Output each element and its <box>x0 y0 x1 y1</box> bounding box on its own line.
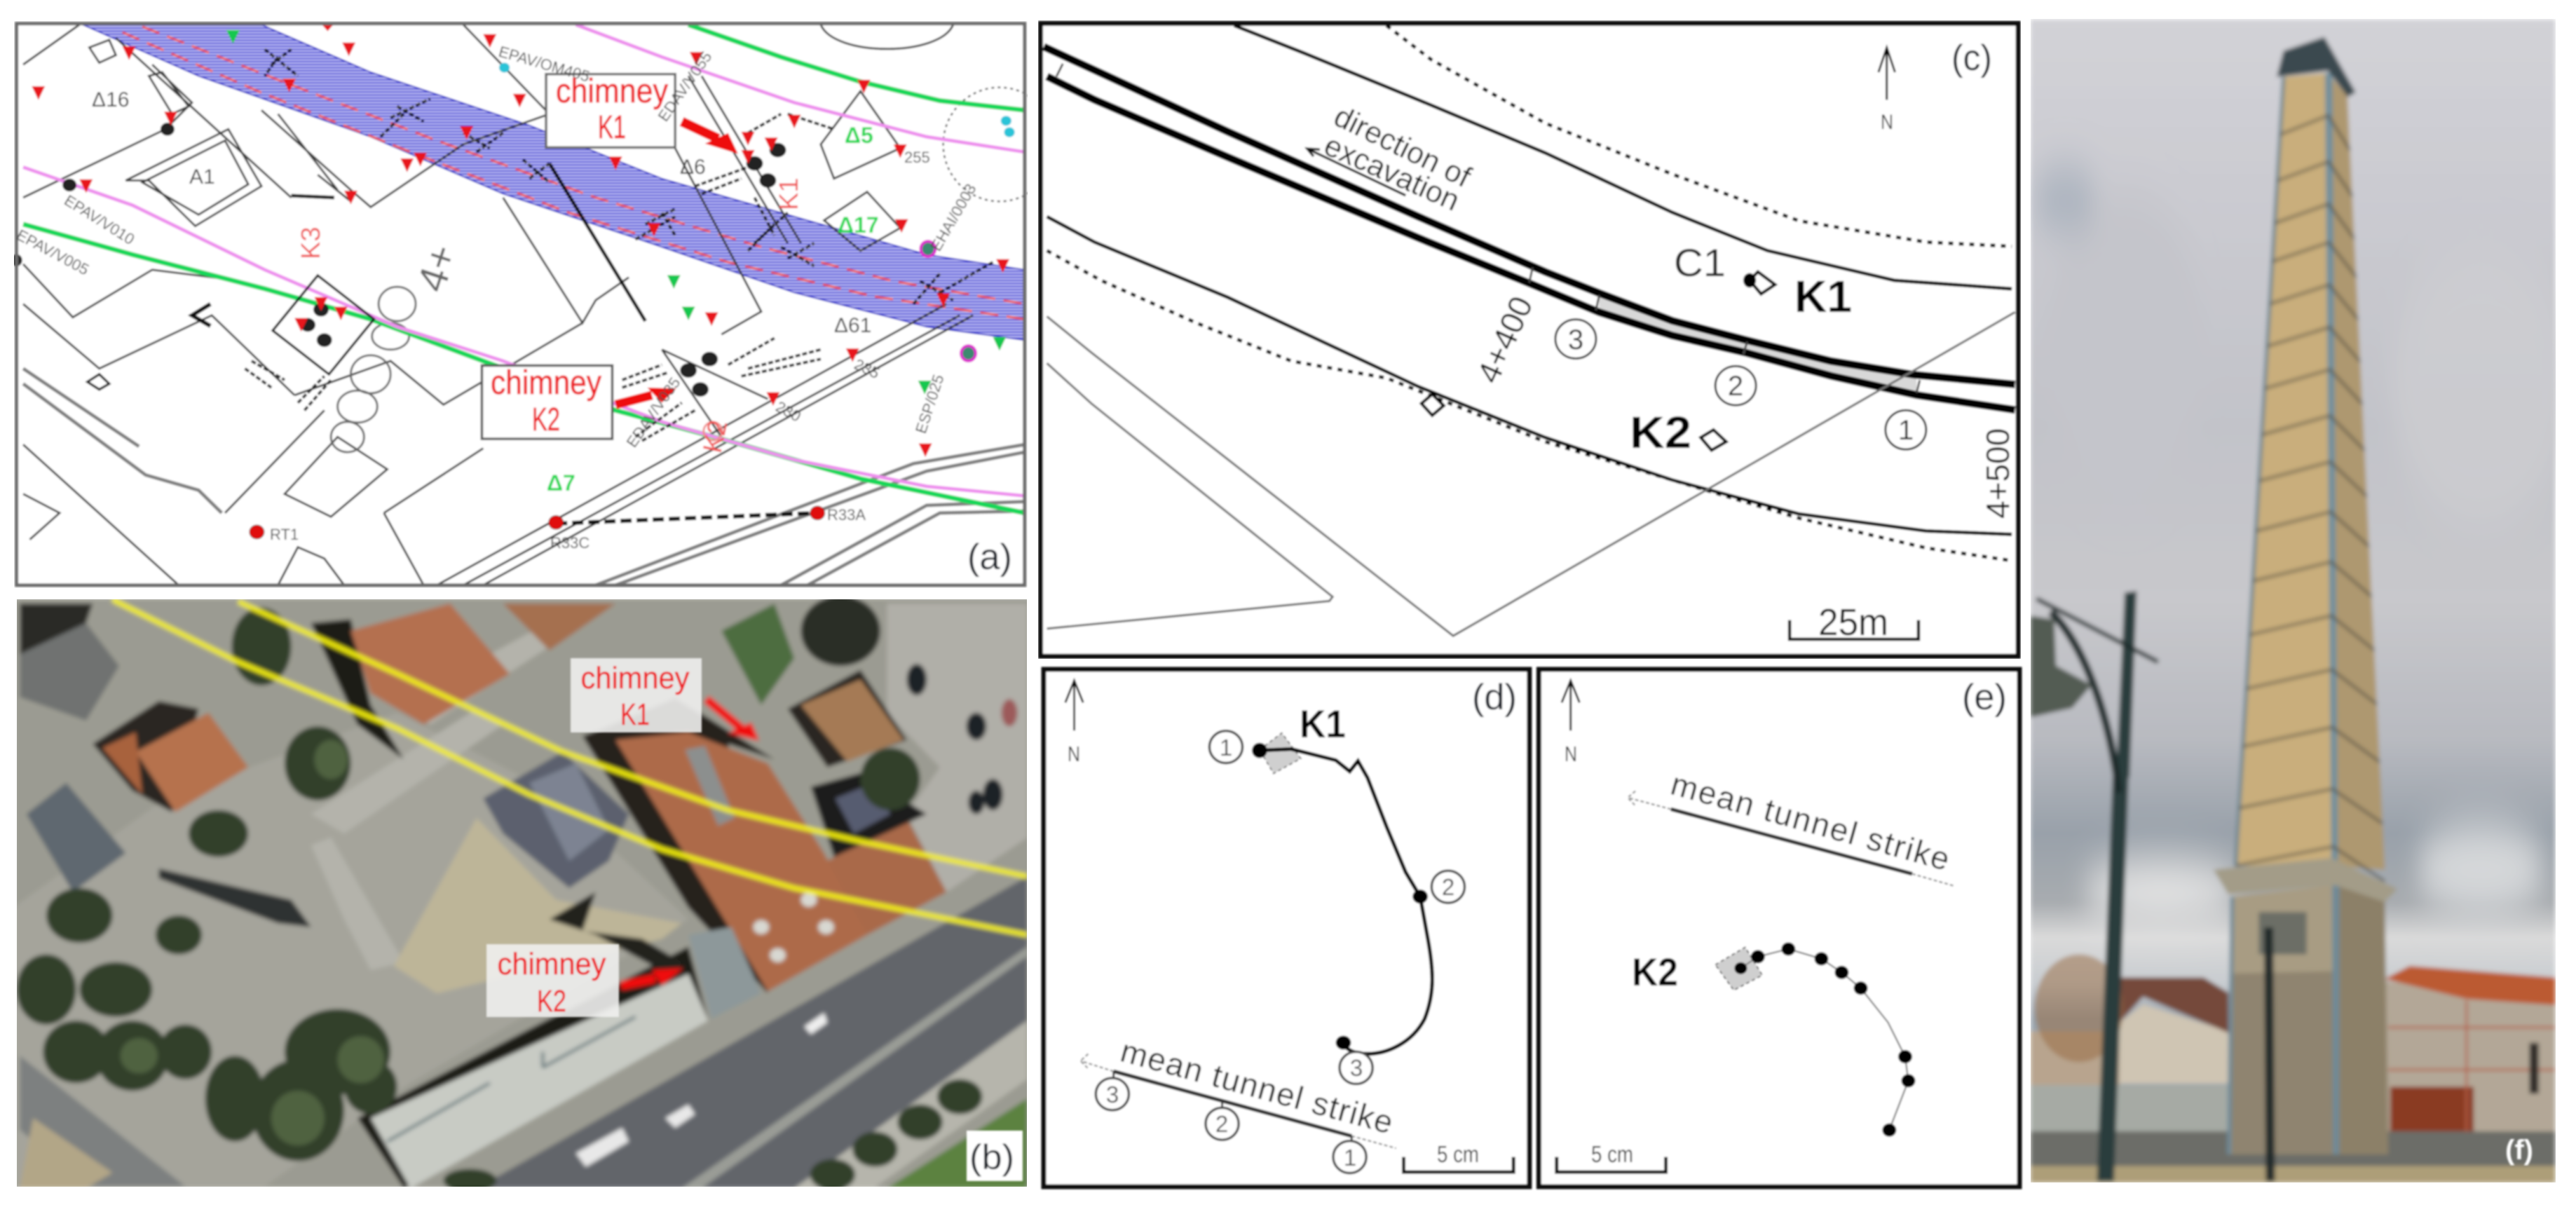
solar panels left <box>27 783 125 892</box>
glass roof <box>483 751 629 888</box>
sky <box>2031 19 2556 1181</box>
plan drawing <box>1041 23 2018 656</box>
map labels: K2 <box>698 418 733 456</box>
skylight strip <box>685 746 735 826</box>
strike extensions <box>1081 1054 1396 1148</box>
map labels: A1 <box>189 165 215 189</box>
K2 labels: (e) <box>1962 677 2007 718</box>
panel a: tunnel plan map <box>11 24 1056 585</box>
map labels: Δ7 <box>547 470 575 496</box>
mean strike line <box>1671 809 1912 874</box>
map labels: K3 <box>297 227 326 259</box>
plan labels: C1 <box>1674 240 1726 285</box>
cars <box>576 1128 629 1167</box>
panel letter f: (f) <box>2505 1135 2533 1166</box>
photo scene <box>2031 19 2570 1183</box>
green lawn top <box>721 604 794 705</box>
panel letter a: (a) <box>967 537 1012 578</box>
footprint of chimney K2 <box>1715 947 1762 990</box>
chimney K1 text: K1 <box>620 697 650 732</box>
top left building <box>20 619 119 721</box>
chimney K2 label <box>491 364 601 437</box>
scale bar <box>1557 1157 1666 1172</box>
K1 labels: 3 <box>1350 1055 1363 1081</box>
map labels: 235 <box>852 355 882 382</box>
displacement curve <box>1740 949 1908 1130</box>
arrow to K1 <box>682 121 738 154</box>
plaque <box>2258 912 2307 955</box>
clouds <box>2033 170 2570 924</box>
plan labels: 3 <box>1568 325 1583 355</box>
panel border <box>1041 23 2018 656</box>
low wall <box>2031 1085 2230 1133</box>
chimney base right <box>2337 885 2388 1154</box>
map labels: 230 <box>773 397 804 425</box>
tunnel influence lines <box>1047 25 2012 534</box>
map labels: EPAV/OM405 <box>497 43 592 86</box>
base corners <box>2227 885 2339 1154</box>
scaffolding <box>2388 1000 2556 1131</box>
road <box>477 876 1028 1188</box>
pink alignment lines <box>23 25 1025 496</box>
tan square <box>394 818 682 993</box>
measurement dots <box>1734 942 1915 1137</box>
chimney K1 label <box>556 73 668 145</box>
red monitoring points <box>250 506 825 539</box>
panel letter b: (b) <box>969 1138 1014 1177</box>
circled numbers <box>1096 731 1464 1173</box>
red hoarding <box>2390 1086 2474 1138</box>
instrumentation targets <box>11 123 786 396</box>
chimney shadow <box>159 868 311 927</box>
courtyard building <box>811 773 927 857</box>
small lamp post <box>2268 927 2270 1181</box>
chimney K1 label: K1 <box>598 109 626 145</box>
roof windows <box>754 893 834 962</box>
panel c: tunnel alignment plan <box>1041 23 2018 656</box>
right building roof <box>2385 966 2556 1005</box>
sidewalk and verge <box>794 1021 1028 1188</box>
panel border <box>1539 669 2019 1187</box>
chimney base left <box>2228 885 2337 1154</box>
footprint of chimney K1 <box>1260 733 1301 774</box>
K1 labels: mean tunnel strike <box>1117 1032 1397 1141</box>
panel f: chimney photograph <box>2031 19 2570 1183</box>
north arrow <box>1879 48 1895 100</box>
map drawing <box>11 24 1056 585</box>
map labels: ESP/025 <box>912 372 948 436</box>
chimney K1 box <box>546 74 675 147</box>
dotted limits <box>1047 25 2012 561</box>
window <box>2530 1043 2539 1093</box>
right pavement <box>887 604 1028 892</box>
K2 labels: mean tunnel strike <box>1667 765 1954 878</box>
plan labels: excavation <box>1319 128 1464 218</box>
parked cars <box>907 664 1003 814</box>
left low houses <box>2031 1031 2119 1085</box>
ground <box>13 598 1033 1188</box>
panel d: K1 displacement path <box>1044 669 1529 1187</box>
plan labels: direction of <box>1329 100 1477 195</box>
K1 labels: 5 cm <box>1437 1141 1479 1167</box>
chimney K2 text: chimney <box>498 947 606 981</box>
green alignment lines <box>23 25 1025 513</box>
bottom left street <box>20 1056 185 1186</box>
shaft edges <box>2325 73 2338 866</box>
north arrow <box>1065 681 1083 730</box>
left building <box>2118 1004 2228 1084</box>
K1 drawing <box>1044 669 1529 1187</box>
arrow to K1 <box>707 699 759 741</box>
map labels: RT1 <box>270 526 299 543</box>
K1 labels: 1 <box>1220 735 1232 761</box>
chimney K1 label box <box>571 658 702 732</box>
red survey triangles <box>32 24 1009 457</box>
letter box <box>967 1131 1023 1181</box>
panel border <box>1044 669 1529 1187</box>
measurement dots <box>1252 743 1428 1050</box>
ground <box>2031 1131 2556 1170</box>
map labels: Δ5 <box>845 123 873 148</box>
scale bar <box>1404 1157 1513 1172</box>
chimney K1 text <box>580 661 690 732</box>
chimney K1 label: chimney <box>556 73 668 110</box>
map labels: Δ6 <box>680 156 706 179</box>
chimney shaft left face <box>2235 73 2333 866</box>
plan labels: K1 <box>1794 271 1852 322</box>
circled numbers <box>1555 320 1926 449</box>
tunnel centre lines <box>123 27 1025 319</box>
cyan points <box>499 62 1015 137</box>
map labels: Δ17 <box>838 212 879 238</box>
chimney K2 text <box>498 947 606 1018</box>
road outlines <box>1047 312 2015 636</box>
panel b: aerial photograph <box>13 596 1033 1192</box>
panel e: K2 displacement path <box>1539 669 2019 1187</box>
scale bar <box>1790 620 1919 639</box>
north arrow <box>1562 681 1579 730</box>
K2 labels: K2 <box>1632 950 1678 994</box>
aerial scene <box>13 596 1033 1192</box>
plan labels: 2 <box>1728 371 1743 402</box>
map labels: 4+ <box>409 239 466 297</box>
bottom left roof <box>20 1118 113 1188</box>
map labels: EPAV/V005 <box>14 226 92 278</box>
chimney K2 label: chimney <box>491 364 601 402</box>
map labels: EPAV/V010 <box>61 191 137 248</box>
displacement curve <box>1260 749 1432 1054</box>
iron hoops <box>2235 116 2385 881</box>
marker dot C1 <box>1743 273 1756 287</box>
right building wall <box>2385 981 2556 1139</box>
arrow to K2 <box>621 968 683 986</box>
panel border <box>17 24 1025 585</box>
bright tree patches <box>121 740 384 1145</box>
tunnel walls <box>1044 47 2015 410</box>
left building roofs <box>2118 977 2228 1033</box>
paved plaza <box>13 713 688 1186</box>
plan labels: 1 <box>1898 415 1914 446</box>
K1 labels: N <box>1068 742 1080 766</box>
K2 drawing <box>1539 669 2019 1187</box>
K1 labels: 2 <box>1442 874 1454 900</box>
K2 labels <box>1565 677 2007 1167</box>
chimney K2 box <box>482 366 612 439</box>
ovals <box>331 287 416 452</box>
plan labels: 25m <box>1818 601 1888 643</box>
grey double road lines <box>23 369 1025 585</box>
chimney K2 text: K2 <box>537 984 566 1018</box>
K2 labels: 5 cm <box>1591 1141 1633 1167</box>
chimney cap <box>2277 37 2356 97</box>
chimney K2 label box <box>486 944 619 1017</box>
long pale building <box>357 946 708 1188</box>
K2 labels: N <box>1565 742 1577 766</box>
magenta markers <box>921 241 976 361</box>
arrow to K2 <box>615 388 676 404</box>
strike ticks <box>1114 1071 1351 1143</box>
plan labels: N <box>1881 111 1893 134</box>
map labels: EDAV/V035 <box>623 374 684 451</box>
lamp post <box>2097 770 2129 1181</box>
light pavement strips <box>311 608 609 970</box>
K1 labels: 1 <box>1344 1145 1356 1171</box>
trees <box>17 608 982 1192</box>
map labels: K1 <box>775 178 804 210</box>
excavation arrow <box>1307 149 1405 196</box>
map labels: Δ16 <box>92 88 129 111</box>
map labels: EHAI/0003 <box>927 181 980 254</box>
plan labels: 4+400 <box>1470 291 1540 388</box>
map labels: R33C <box>550 534 590 552</box>
faint red marker <box>704 422 722 440</box>
chimney K2 label: K2 <box>532 401 560 437</box>
panel b labels <box>486 658 1023 1181</box>
strike extensions <box>1628 791 1955 886</box>
map labels: Δ61 <box>834 314 871 337</box>
tunnel band <box>83 25 1025 340</box>
black section lines <box>88 163 817 524</box>
lamp shade <box>2031 615 2092 717</box>
plan labels: (c) <box>1951 38 1992 79</box>
chainage ticks <box>1056 64 1920 393</box>
chimney markers <box>1422 272 1775 450</box>
red roofs <box>93 604 946 993</box>
green survey triangles <box>226 30 1006 395</box>
chimney shaft right face <box>2328 73 2385 870</box>
K1 labels: K1 <box>1300 702 1346 746</box>
yellow tunnel lines <box>113 600 1028 935</box>
map labels: R33A <box>827 506 866 524</box>
mean strike line <box>1114 1071 1351 1136</box>
map labels: 255 <box>904 149 930 166</box>
building outlines <box>23 25 973 585</box>
map labels: EDAV/V055 <box>655 48 716 125</box>
plan labels <box>1319 38 2016 643</box>
plan labels: K2 <box>1630 407 1691 458</box>
cornice <box>2214 858 2397 902</box>
plan labels: 4+500 <box>1979 428 2016 519</box>
dense survey clutter <box>245 49 993 441</box>
K1 labels: 2 <box>1215 1111 1228 1137</box>
lamp arms <box>2036 599 2158 662</box>
K1 labels <box>1068 677 1517 1171</box>
map labels <box>14 43 1012 578</box>
K1 labels: (d) <box>1472 677 1517 718</box>
chimney K1 text: chimney <box>580 661 690 695</box>
dashed circle <box>941 86 1028 203</box>
autumn tree <box>2035 955 2124 1062</box>
excavated section shading <box>1599 293 1916 395</box>
K1 labels: 3 <box>1106 1082 1119 1107</box>
